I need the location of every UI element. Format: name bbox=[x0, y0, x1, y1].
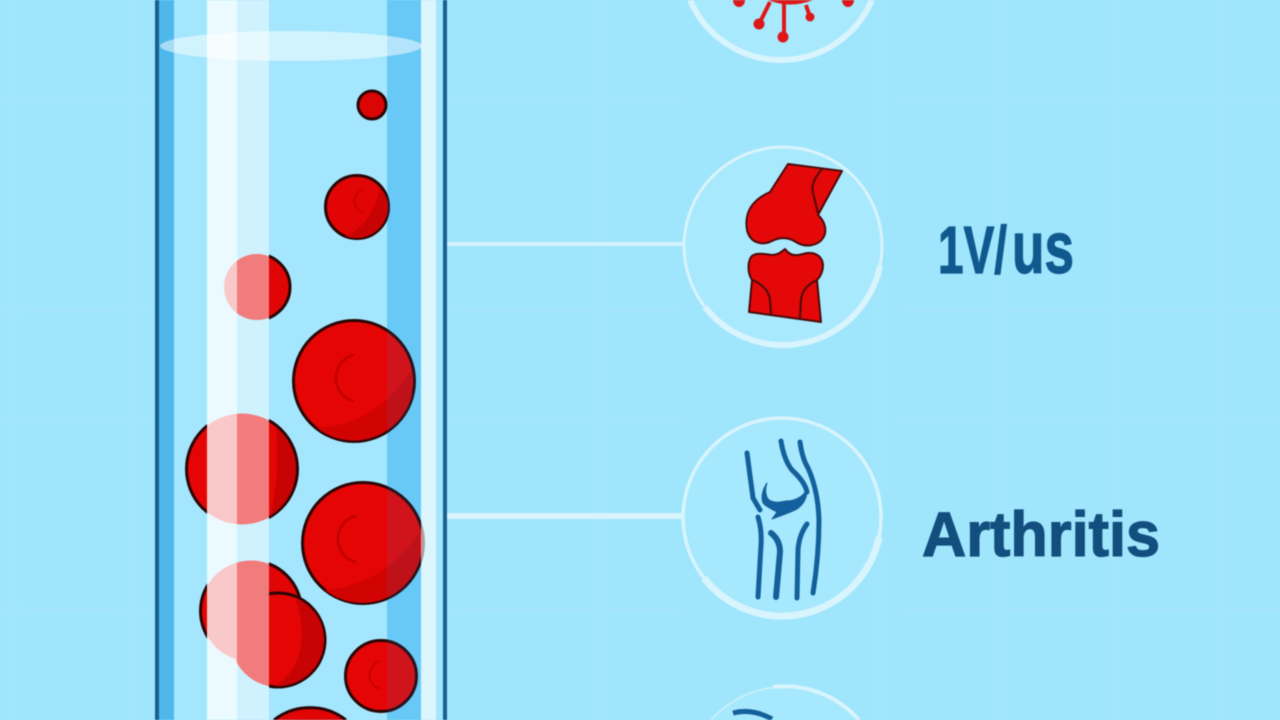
cell: bottom cut off bbox=[274, 708, 346, 720]
tube body bbox=[159, 0, 443, 720]
bone ring thick edge bbox=[705, 266, 880, 345]
arthritis ring bbox=[683, 418, 881, 616]
right band tint over cells bbox=[387, 0, 421, 720]
label: 1V/US: 1V/ bbox=[938, 213, 1007, 288]
cell: large upper bbox=[294, 320, 414, 442]
tube right wall bbox=[443, 0, 447, 720]
blue knee outline bbox=[747, 441, 819, 598]
wide white highlight bbox=[207, 0, 237, 720]
label: Arthritis: Arthritis bbox=[922, 500, 1160, 570]
connector line: 1V/US bbox=[447, 242, 683, 246]
infographic canvas bbox=[154, 0, 1159, 720]
cell: overlapping front bbox=[231, 593, 325, 687]
damaged cartilage bbox=[762, 483, 807, 519]
red knee bones bbox=[746, 164, 842, 322]
arthritis icon group bbox=[683, 418, 881, 616]
test tube bbox=[155, 0, 447, 720]
connector line: arthritis bbox=[447, 513, 683, 519]
red blood cells bbox=[186, 91, 424, 720]
tube left wall bbox=[155, 0, 159, 720]
arthritis ring thick edge bbox=[704, 537, 879, 616]
cell: small lower right bbox=[346, 640, 416, 712]
right white highlight bbox=[421, 0, 436, 720]
bottom icon arc bbox=[733, 711, 772, 719]
bone joint icon group bbox=[684, 147, 882, 345]
cell: partly behind highlight bbox=[224, 254, 290, 320]
bottom ring bbox=[711, 687, 859, 720]
virus icon bbox=[733, 0, 854, 42]
cell: overlapping rear bbox=[200, 560, 302, 662]
virus icon group bbox=[690, 0, 872, 60]
outline-free cells under highlights bbox=[206, 252, 270, 688]
cell: small bbox=[326, 176, 388, 238]
cell: large lower bbox=[302, 482, 424, 604]
cell: small top bbox=[358, 91, 386, 119]
bottom icon group bbox=[711, 686, 859, 720]
liquid surface bbox=[160, 31, 422, 61]
soft white highlight bbox=[237, 0, 269, 720]
tube left shaded band bbox=[159, 0, 174, 720]
label: 1V/US: us bbox=[1012, 208, 1074, 289]
upper bone bbox=[746, 164, 842, 245]
cell: large left bbox=[186, 414, 298, 524]
bottom ring highlight bbox=[773, 686, 859, 720]
tube right shaded band bbox=[387, 0, 421, 720]
lower bone bbox=[748, 249, 823, 322]
top ring bbox=[690, 0, 872, 60]
bone ring bbox=[684, 147, 882, 345]
